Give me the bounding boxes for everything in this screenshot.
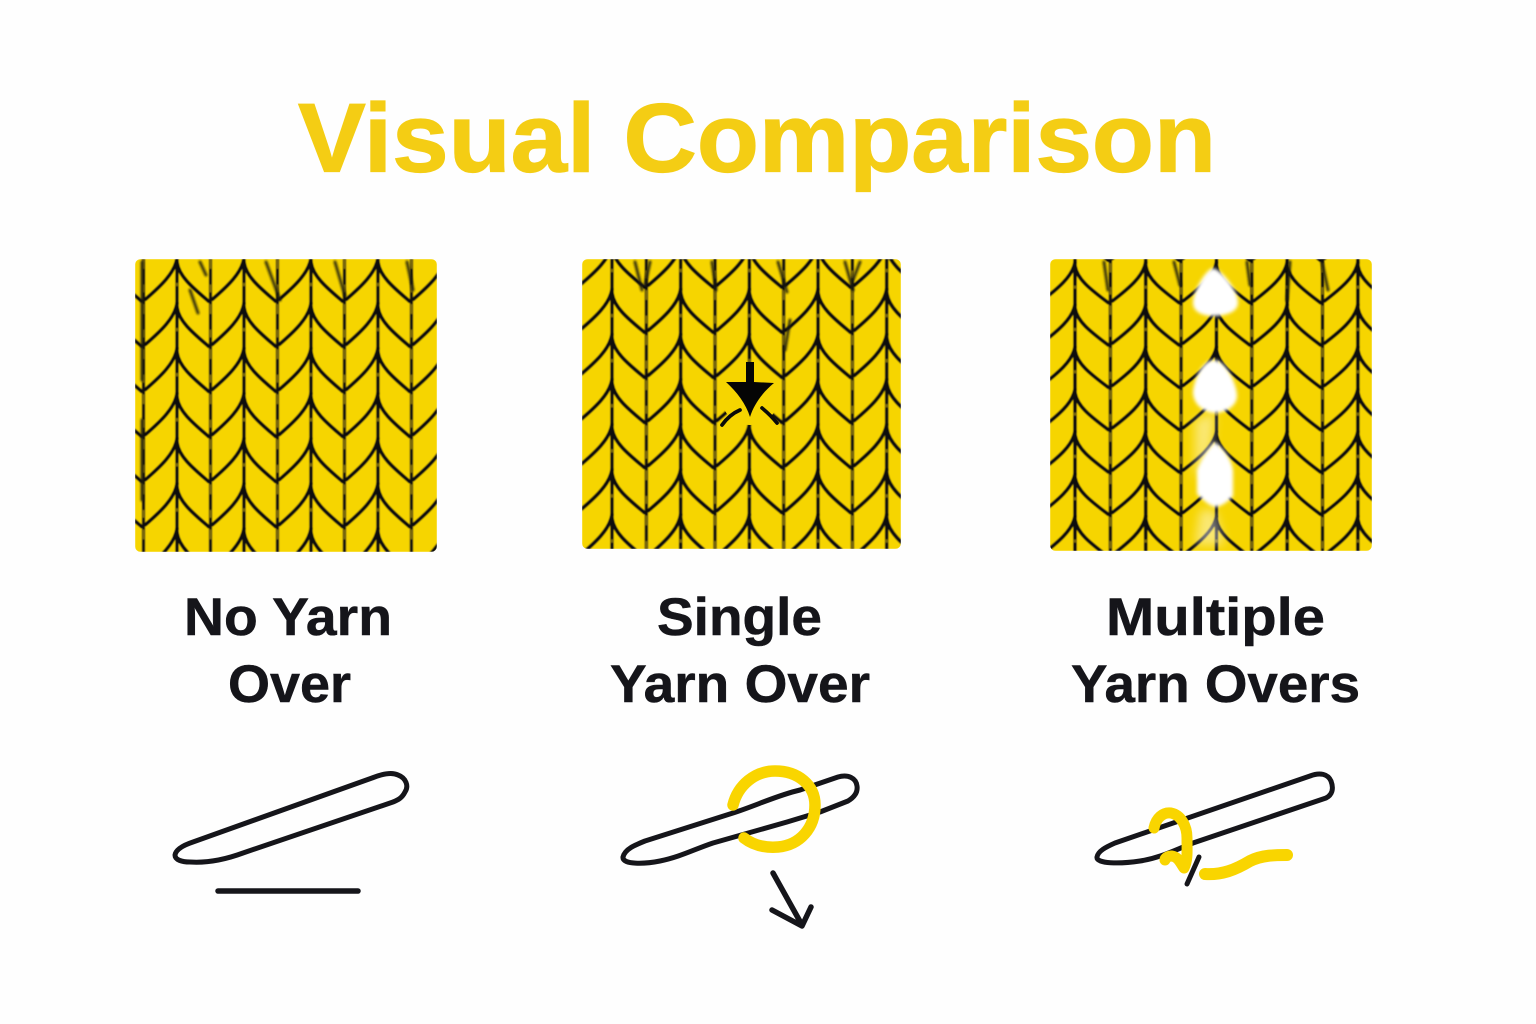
knit swatch: multiple yarn overs: [1050, 259, 1372, 551]
icon: black arrow on swatch: [722, 362, 777, 425]
icon: needle with yarn loop: [623, 771, 857, 926]
knit swatch: no yarn over: [135, 259, 437, 552]
icon: needle with tangled yarn: [1097, 774, 1332, 884]
heading: single yarn over: Single: [657, 588, 822, 647]
heading: multiple yarn overs: Yarn Overs: [1071, 655, 1360, 714]
heading: multiple yarn overs: Multiple: [1106, 588, 1325, 647]
heading: no yarn over: No Yarn: [184, 588, 392, 647]
patch around arrow: [722, 373, 778, 425]
icon: needle with straight line: [175, 774, 407, 891]
heading: multiple yarn overs: [1071, 588, 1360, 714]
panel: multiple yarn overs: [1050, 259, 1372, 884]
heading: single yarn over: [610, 588, 870, 714]
panel: single yarn over: [582, 259, 901, 926]
heading: no yarn over: Over: [228, 655, 351, 714]
heading: single yarn over: Yarn Over: [610, 655, 870, 714]
knit swatch: single yarn over: [582, 259, 901, 549]
holes in swatch: [1193, 268, 1238, 545]
heading: no yarn over: [184, 588, 392, 714]
title: Visual Comparison: [298, 84, 1216, 192]
panel: no yarn over: [135, 259, 437, 891]
